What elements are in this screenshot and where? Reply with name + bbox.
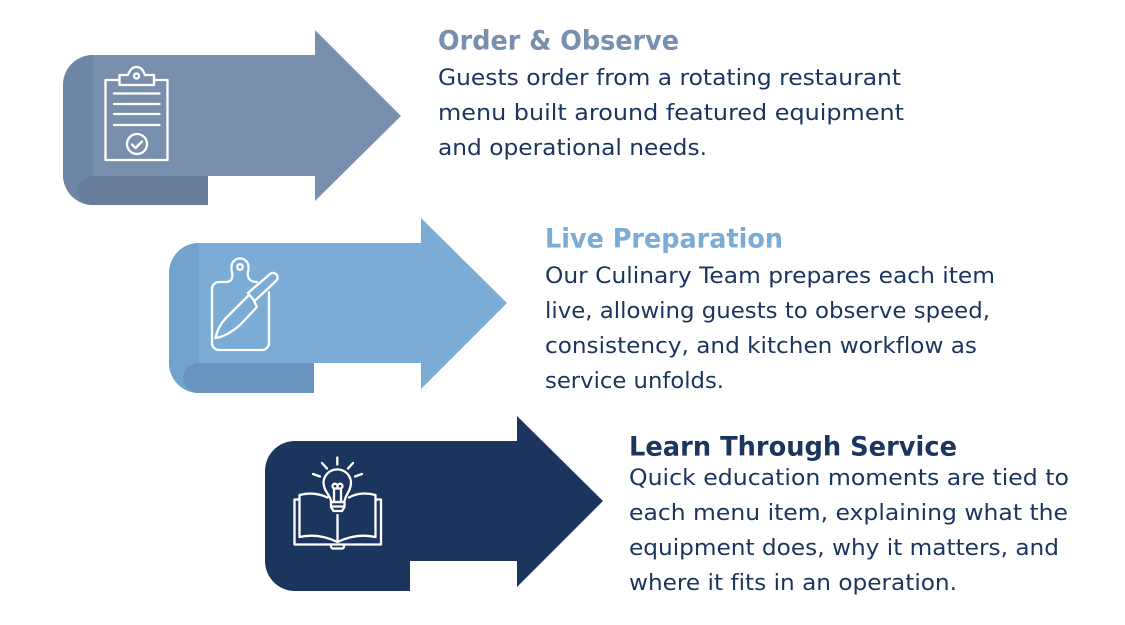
step 3: learn through service (265, 416, 1069, 596)
icon: clipboard (106, 67, 168, 160)
text block: learn through service (629, 466, 1069, 596)
text block: live preparation: service unfolds. (545, 369, 724, 394)
heading: learn through service: Learn Through Service (629, 432, 957, 462)
text block: order and observe: menu built around featured equipment (438, 101, 904, 126)
text block: live preparation (545, 264, 995, 394)
icon: cutting board and knife (212, 258, 278, 350)
text block: learn through service: each menu item, explaining what the (629, 501, 1068, 526)
step 1: order and observe (63, 26, 904, 205)
text block: live preparation: consistency, and kitchen workflow as (545, 334, 977, 359)
text block: order and observe (438, 66, 904, 161)
text block: learn through service: where it fits in an operation. (629, 571, 957, 596)
text block: order and observe: Guests order from a rotating restaurant (438, 66, 901, 91)
arrow 2 (169, 218, 507, 393)
icon: open book and light bulb (294, 458, 381, 548)
step 2: live preparation (169, 218, 995, 394)
text block: live preparation: live, allowing guests to observe speed, (545, 299, 990, 324)
text block: live preparation: Our Culinary Team prepares each item (545, 264, 995, 289)
text block: learn through service: equipment does, why it matters, and (629, 536, 1059, 561)
text block: learn through service: Quick education moments are tied to (629, 466, 1069, 491)
text block: order and observe: and operational needs. (438, 136, 707, 161)
heading: order and observe: Order & Observe (438, 26, 679, 56)
arrow 1 (63, 30, 401, 205)
arrow 3 (265, 416, 603, 591)
heading: live preparation: Live Preparation (545, 224, 783, 254)
